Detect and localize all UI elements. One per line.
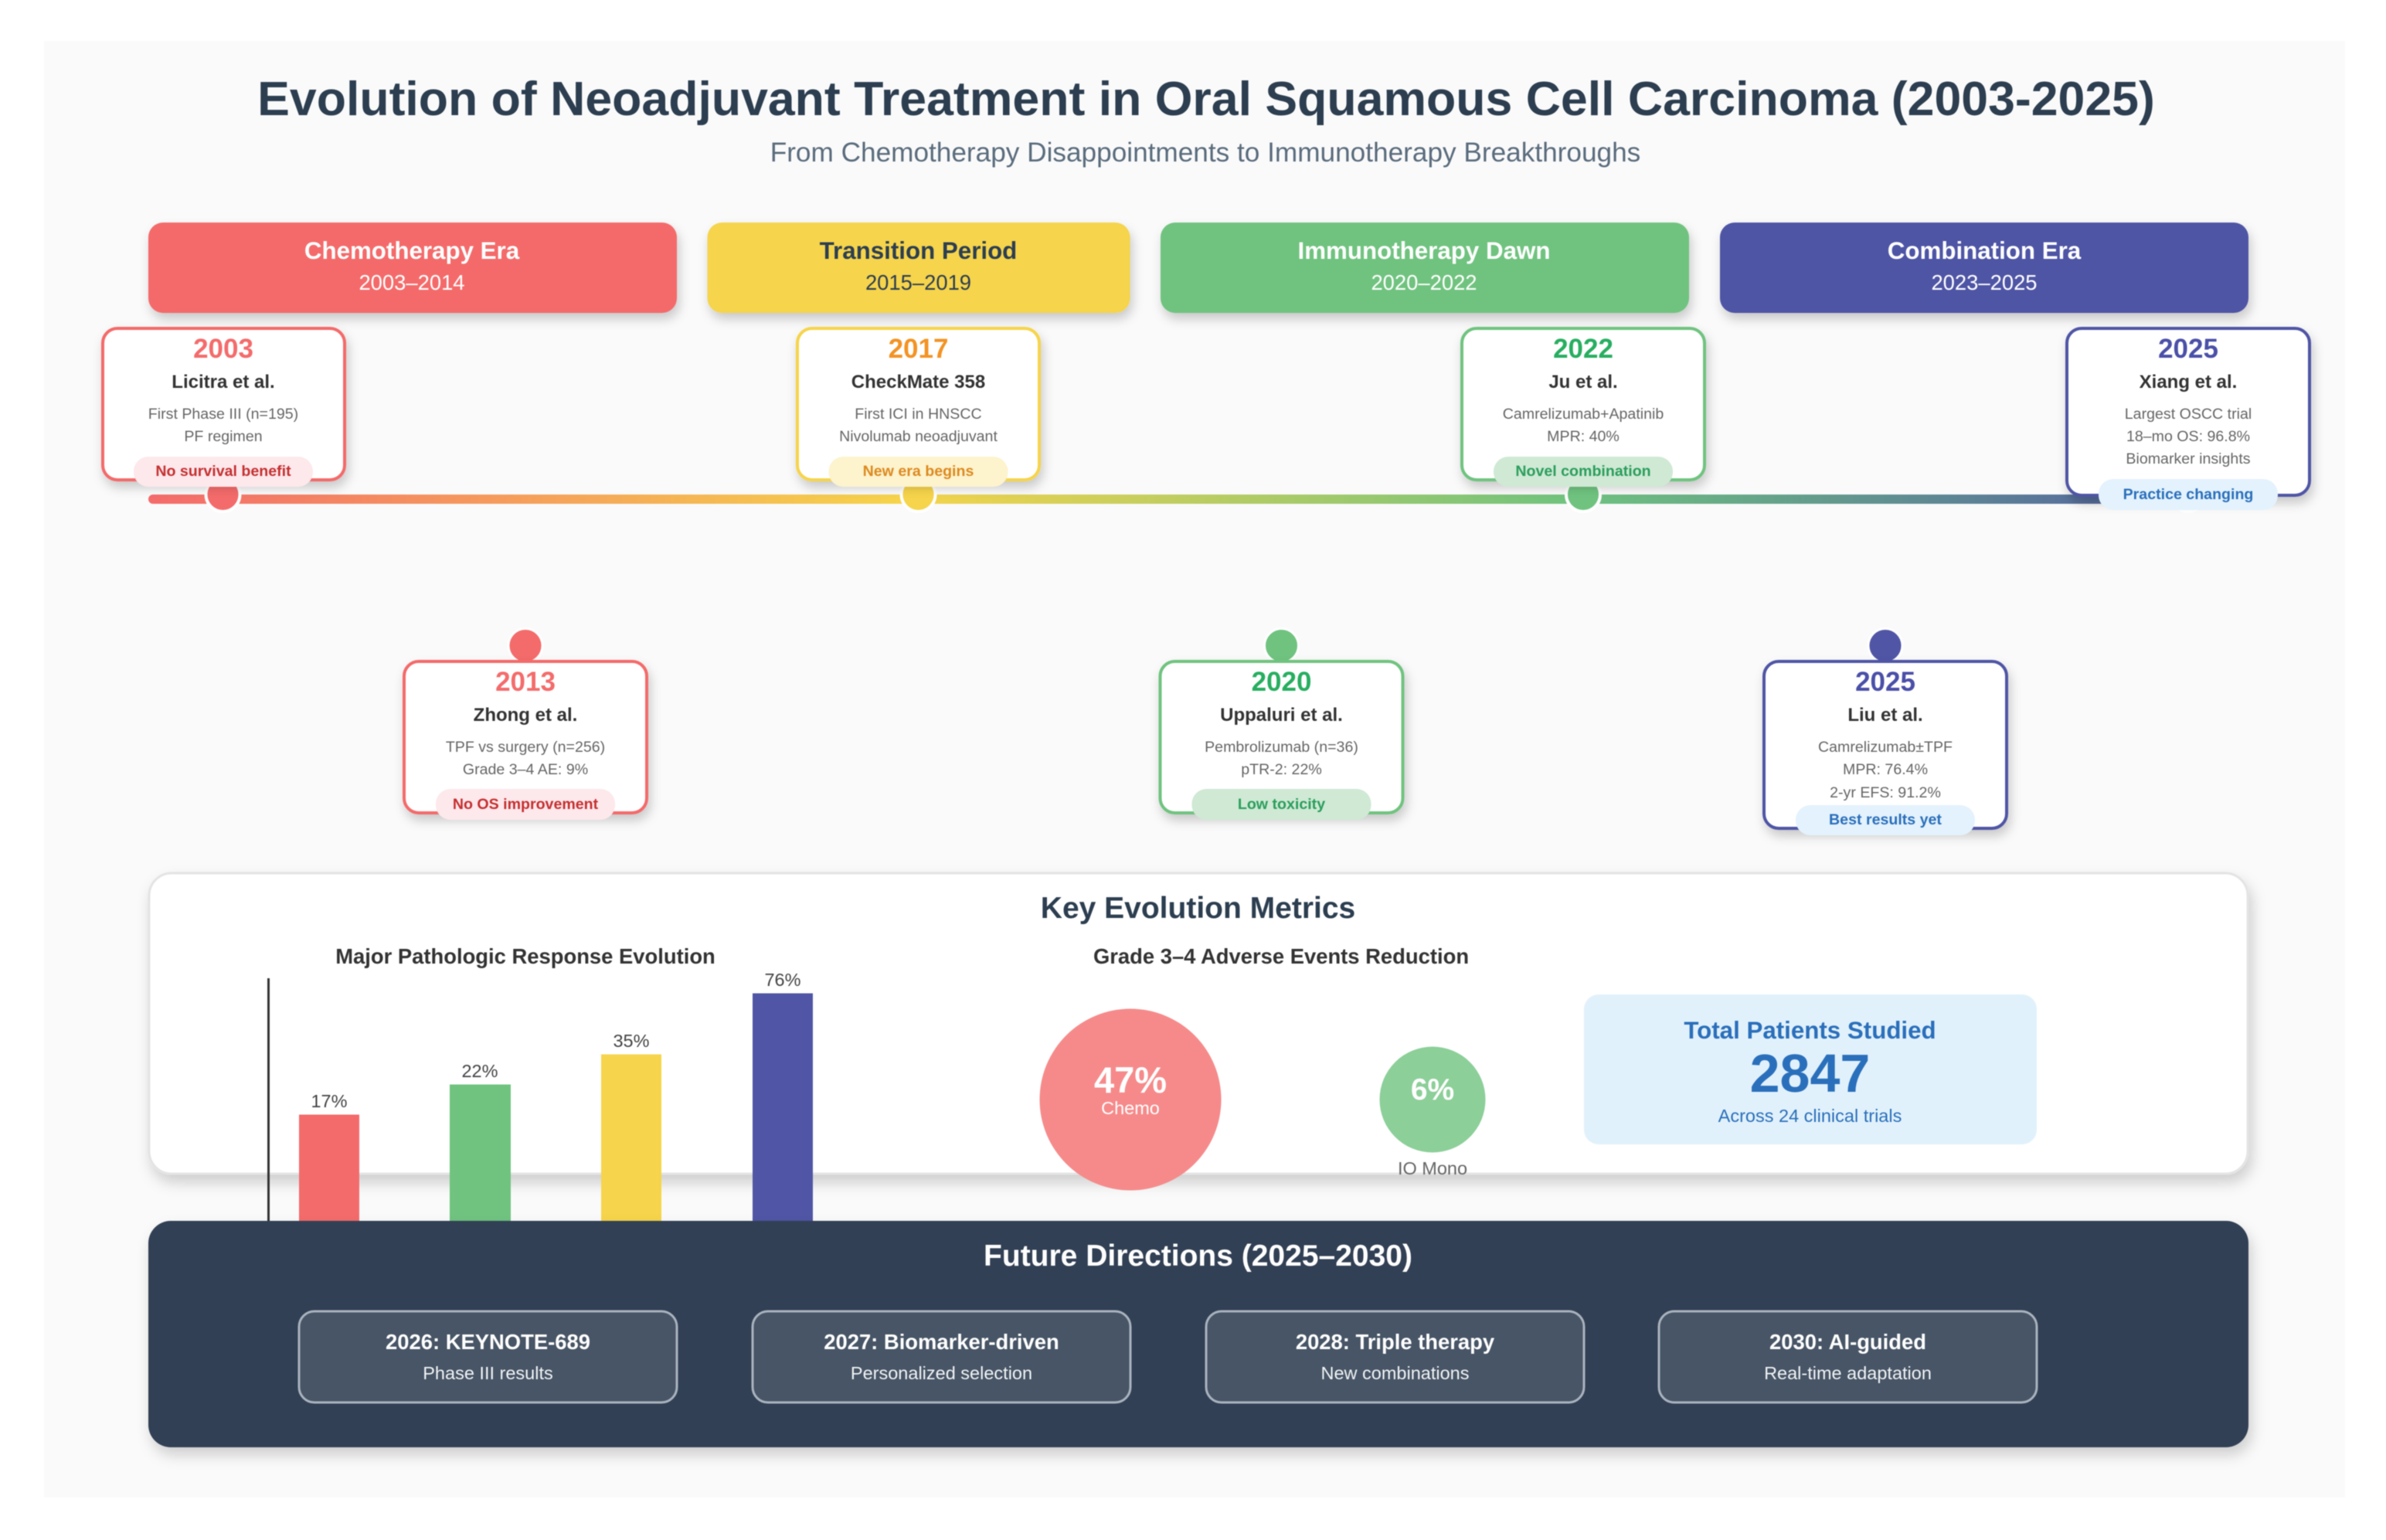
chart title: Major Pathologic Response Evolution — [335, 944, 715, 968]
circle: chemo 47%: 47% — [1094, 1059, 1167, 1100]
bar 35% — [601, 1031, 661, 1226]
future box 2030: 2030: AI-guided — [1769, 1330, 1926, 1354]
subtitle: From Chemotherapy Disappointments to Immunotherapy Breakthroughs — [770, 138, 1640, 168]
metrics heading: Key Evolution Metrics — [1041, 892, 1355, 925]
card: 2025 Xiang: Xiang et al. — [2140, 372, 2237, 393]
card: 2017 CheckMate 358: First ICI in HNSCC — [855, 406, 982, 423]
era band: Immunotherapy Dawn — [1161, 223, 1689, 313]
card: 2022 Ju: Camrelizumab+Apatinib — [1503, 406, 1664, 423]
circle: IO mono 6%: IO Mono — [1398, 1158, 1467, 1178]
card: 2013 Zhong: No OS improvement — [453, 796, 599, 813]
title: Evolution of Neoadjuvant Treatment in Oral Squamous Cell Carcinoma (2003-2025) — [257, 72, 2155, 126]
panel: key evolution metrics — [149, 873, 2248, 1174]
era band: Combination Era: Combination Era — [1888, 237, 2082, 264]
future box 2026: 2026: KEYNOTE-689 — [386, 1330, 590, 1354]
card: 2013 Zhong: TPF vs surgery (n=256) — [446, 739, 605, 756]
card: 2025 Liu: 2025 — [1855, 667, 1915, 697]
card: 2013 Zhong: Zhong et al. — [474, 705, 577, 726]
timeline dot 2017 — [901, 478, 935, 512]
card: 2017 CheckMate 358: CheckMate 358 — [851, 372, 985, 393]
card: 2017 CheckMate 358: Nivolumab neoadjuvant — [839, 428, 998, 445]
card: 2022 Ju: 2022 — [1553, 334, 1613, 364]
era band: Chemotherapy Era: 2003–2014 — [359, 270, 465, 294]
card: 2022 Ju — [1462, 328, 1705, 487]
lower dot 2020 — [1264, 629, 1298, 663]
card: 2025 Xiang: 2025 — [2158, 334, 2218, 364]
card: 2025 Xiang: Biomarker insights — [2126, 450, 2251, 467]
card: 2025 Liu: Camrelizumab±TPF — [1818, 739, 1953, 756]
card: 2017 CheckMate 358: 2017 — [889, 334, 948, 364]
era band: Combination Era — [1720, 223, 2248, 313]
future box 2030: Real-time adaptation — [1764, 1363, 1932, 1383]
future box 2027: Personalized selection — [851, 1363, 1032, 1383]
era band: Transition Period — [708, 223, 1130, 313]
card: 2003 Licitra: 2003 — [193, 334, 253, 364]
lower dot 2013 — [508, 629, 542, 663]
card: 2022 Ju: MPR: 40% — [1547, 428, 1620, 445]
bar 76% — [753, 970, 813, 1226]
chart title: Grade 3–4 Adverse Events Reduction — [1093, 944, 1469, 968]
card: 2020 Uppaluri: 2020 — [1252, 667, 1311, 697]
axis — [267, 978, 270, 1226]
bar 22% — [450, 1061, 511, 1226]
future box 2026 — [299, 1311, 677, 1402]
future box 2030 — [1659, 1311, 2037, 1402]
card: 2025 Liu: 2-yr EFS: 91.2% — [1830, 784, 1941, 801]
era band: Chemotherapy Era — [148, 223, 677, 313]
era band: Transition Period: 2015–2019 — [865, 270, 971, 294]
future box 2028: 2028: Triple therapy — [1296, 1330, 1495, 1354]
card: 2003 Licitra: First Phase III (n=195) — [148, 406, 298, 423]
card: 2025 Liu — [1764, 661, 2007, 835]
timeline bar — [148, 495, 2248, 504]
stat box: total patients: Total Patients Studied — [1684, 1017, 1936, 1044]
card: 2020 Uppaluri — [1161, 661, 1403, 820]
bar 76%: 76% — [764, 970, 801, 990]
future box 2027 — [753, 1311, 1130, 1402]
future heading: Future Directions (2025–2030) — [984, 1239, 1412, 1273]
card: 2003 Licitra: PF regimen — [184, 428, 263, 445]
card: 2025 Liu: Liu et al. — [1847, 705, 1923, 726]
era band: Combination Era: 2023–2025 — [1931, 270, 2038, 294]
card: 2020 Uppaluri: Low toxicity — [1238, 796, 1325, 813]
circle: chemo 47% — [1040, 1009, 1221, 1190]
bar 17% — [299, 1091, 359, 1226]
circle: IO mono 6% — [1380, 1046, 1485, 1178]
card: 2025 Xiang: 18–mo OS: 96.8% — [2126, 428, 2250, 445]
adverse events comparison — [1040, 944, 1485, 1190]
timeline dot 2003 — [206, 478, 240, 512]
circle: chemo 47%: Chemo — [1101, 1098, 1160, 1118]
card: 2017 CheckMate 358 — [797, 328, 1039, 487]
bar 17%: 17% — [311, 1091, 348, 1111]
card: 2020 Uppaluri: pTR-2: 22% — [1241, 761, 1322, 778]
card: 2013 Zhong: Grade 3–4 AE: 9% — [463, 761, 588, 778]
bar chart: major pathologic response — [267, 944, 813, 1226]
future box 2026: Phase III results — [423, 1363, 553, 1383]
stat box: total patients: 2847 — [1750, 1043, 1870, 1103]
era band: Immunotherapy Dawn: 2020–2022 — [1371, 270, 1477, 294]
era band: Chemotherapy Era: Chemotherapy Era — [304, 237, 520, 264]
era band: Immunotherapy Dawn: Immunotherapy Dawn — [1298, 237, 1550, 264]
card: 2022 Ju: Ju et al. — [1548, 372, 1618, 393]
era band: Transition Period: Transition Period — [820, 237, 1017, 264]
timeline dot 2022 — [1566, 478, 1600, 512]
card: 2003 Licitra — [103, 328, 345, 487]
stat box: total patients: Across 24 clinical trials — [1718, 1106, 1902, 1126]
circle: IO mono 6%: 6% — [1411, 1073, 1454, 1107]
card: 2022 Ju: Novel combination — [1515, 463, 1651, 480]
bar 22%: 22% — [461, 1061, 498, 1081]
card: 2003 Licitra: No survival benefit — [155, 463, 291, 480]
future box 2028 — [1206, 1311, 1584, 1402]
card: 2025 Xiang: Largest OSCC trial — [2125, 406, 2252, 423]
future box 2027: 2027: Biomarker-driven — [824, 1330, 1059, 1354]
lower dot 2025 — [1868, 629, 1902, 663]
card: 2025 Xiang — [2067, 328, 2310, 510]
card: 2020 Uppaluri: Uppaluri et al. — [1220, 705, 1343, 726]
card: 2025 Liu: MPR: 76.4% — [1843, 761, 1928, 778]
card: 2025 Liu: Best results yet — [1829, 811, 1942, 828]
card: 2013 Zhong: 2013 — [495, 667, 556, 697]
card: 2017 CheckMate 358: New era begins — [863, 463, 974, 480]
stat box: total patients — [1584, 994, 2037, 1144]
bar 35%: 35% — [613, 1031, 650, 1051]
future box 2028: New combinations — [1320, 1363, 1470, 1383]
card: 2013 Zhong — [404, 661, 647, 820]
card: 2025 Xiang: Practice changing — [2123, 486, 2253, 503]
panel: future directions — [148, 1221, 2248, 1447]
card: 2003 Licitra: Licitra et al. — [172, 372, 275, 393]
timeline dot 2025 — [2171, 478, 2205, 512]
card: 2020 Uppaluri: Pembrolizumab (n=36) — [1205, 739, 1358, 756]
